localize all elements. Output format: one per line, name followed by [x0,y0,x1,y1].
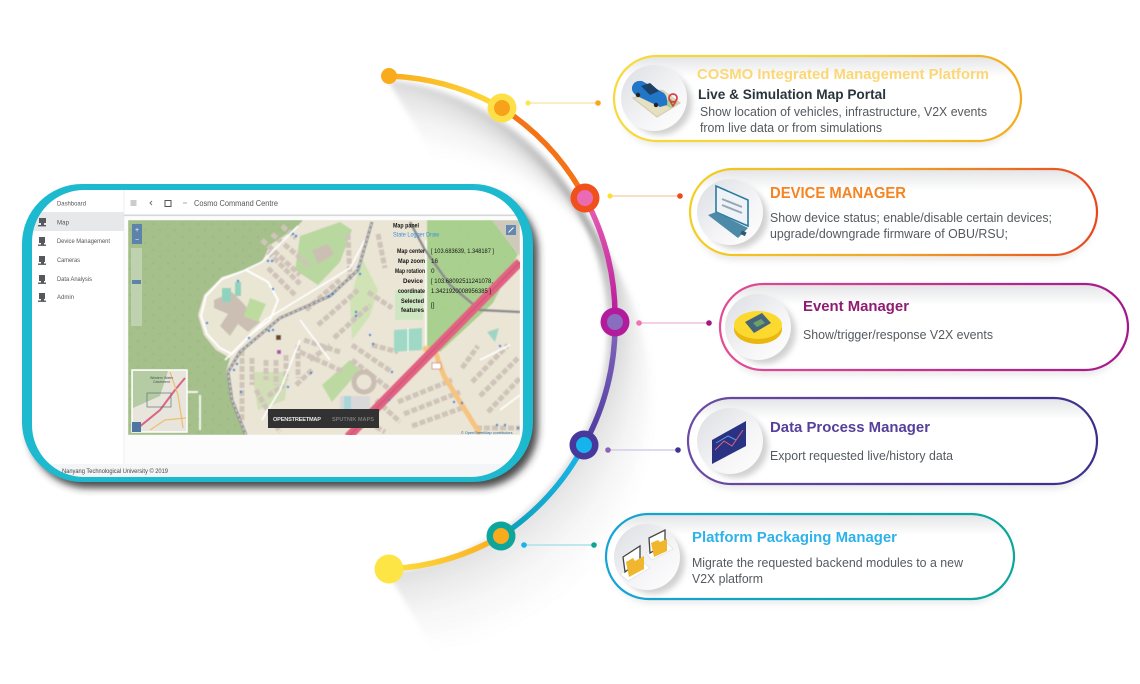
map info panel: 16 [431,258,439,265]
icon: chip on yellow disc [725,294,796,364]
east forest [427,220,518,352]
connector 1 [525,100,601,106]
map info panel: [ 103.683639, 1.348187 ] [431,248,494,255]
description: from live data or from simulations [700,121,882,135]
icon: data board [697,408,768,478]
overview minimap [132,370,187,432]
map info panel: © OpenStreetMap contributors [461,431,513,435]
map controls: + [135,227,139,234]
description [692,556,964,586]
sidebar navigation: Map [57,220,69,226]
map info panel: Selected [401,298,424,305]
device markers [206,233,519,429]
map info panel: State Logger Draw [393,232,439,238]
heading: COSMO Integrated Management Platform [697,66,989,83]
map controls: − [135,237,139,244]
map info panel: [] [431,302,435,309]
map controls [131,224,516,326]
map info panel: Map rotation [395,268,425,275]
description: Show/trigger/response V2X events [803,328,993,342]
sidebar navigation: Admin [57,294,74,301]
timeline arc [374,68,630,584]
description [700,105,987,135]
panel: Device Manager [690,169,1097,261]
sidebar navigation: Data Analysis [57,276,92,283]
layer switcher: SPUTNIK MAPS [332,417,374,423]
urban greens [295,222,352,285]
description [770,211,1052,241]
connector 4 [605,447,681,453]
map info panel: Map panel [393,222,419,230]
connector 5 [521,542,597,548]
description: Show location of vehicles, infrastructure, V2X events [700,105,987,119]
icon: folders and laptops [614,524,685,594]
sidebar navigation [38,200,110,302]
description: Migrate the requested backend modules to a new [692,556,964,570]
heading: Platform Packaging Manager [692,530,897,546]
connector 3 [636,320,712,326]
map info panel: [ 103.68092511241078, [431,278,493,285]
railway [228,222,372,435]
layer switcher: OPENSTREETMAP [273,417,321,423]
buildings as dashed rows [242,226,520,432]
expressway [348,262,520,437]
arc cast shadow [389,82,652,645]
icon: car on map [621,65,692,135]
layer switcher [268,409,379,428]
description: Show device status; enable/disable certain devices; [770,211,1052,225]
map info panel: Device [403,278,423,285]
panel: Data Process Manager [688,398,1097,490]
map info panel [393,222,513,435]
overview minimap: Western Water [150,376,174,380]
sidebar navigation: Cameras [57,257,80,264]
icon: monitor [697,179,768,249]
heading: Event Manager [803,299,909,315]
description: V2X platform [692,572,763,586]
panel: Event Manager [720,284,1128,376]
description: Export requested live/history data [770,449,953,463]
connector 2 [607,193,683,199]
map info panel: 1.3421920008956385 ] [431,288,491,295]
map info panel: Map zoom [398,258,425,265]
panel: COSMO Integrated Management Platform [614,56,1021,146]
header bar: Cosmo Command Centre [194,199,279,208]
forest [128,220,303,435]
white roads [182,226,520,430]
overview minimap: Catchment [153,380,170,384]
subheading: Live & Simulation Map Portal [698,86,886,102]
map [128,220,520,437]
map info panel: features [401,307,424,314]
description: upgrade/downgrade firmware of OBU/RSU; [770,227,1008,241]
panel: Platform Packaging Manager [606,514,1014,604]
sidebar navigation: Device Management [57,238,110,245]
heading: Data Process Manager [770,420,930,436]
footer text: Nanyang Technological University © 2019 [62,467,168,475]
map info panel: coordinate [398,288,425,295]
heading: DEVICE MANAGER [770,185,906,202]
map info panel: Map center [397,248,425,255]
campus peninsula [201,270,278,354]
orange road [423,349,480,434]
sidebar navigation: Dashboard [57,200,86,208]
map info panel: 0 [431,268,435,275]
panel: map screenshot card [22,184,538,488]
header bar [130,199,279,208]
card border [22,184,533,482]
